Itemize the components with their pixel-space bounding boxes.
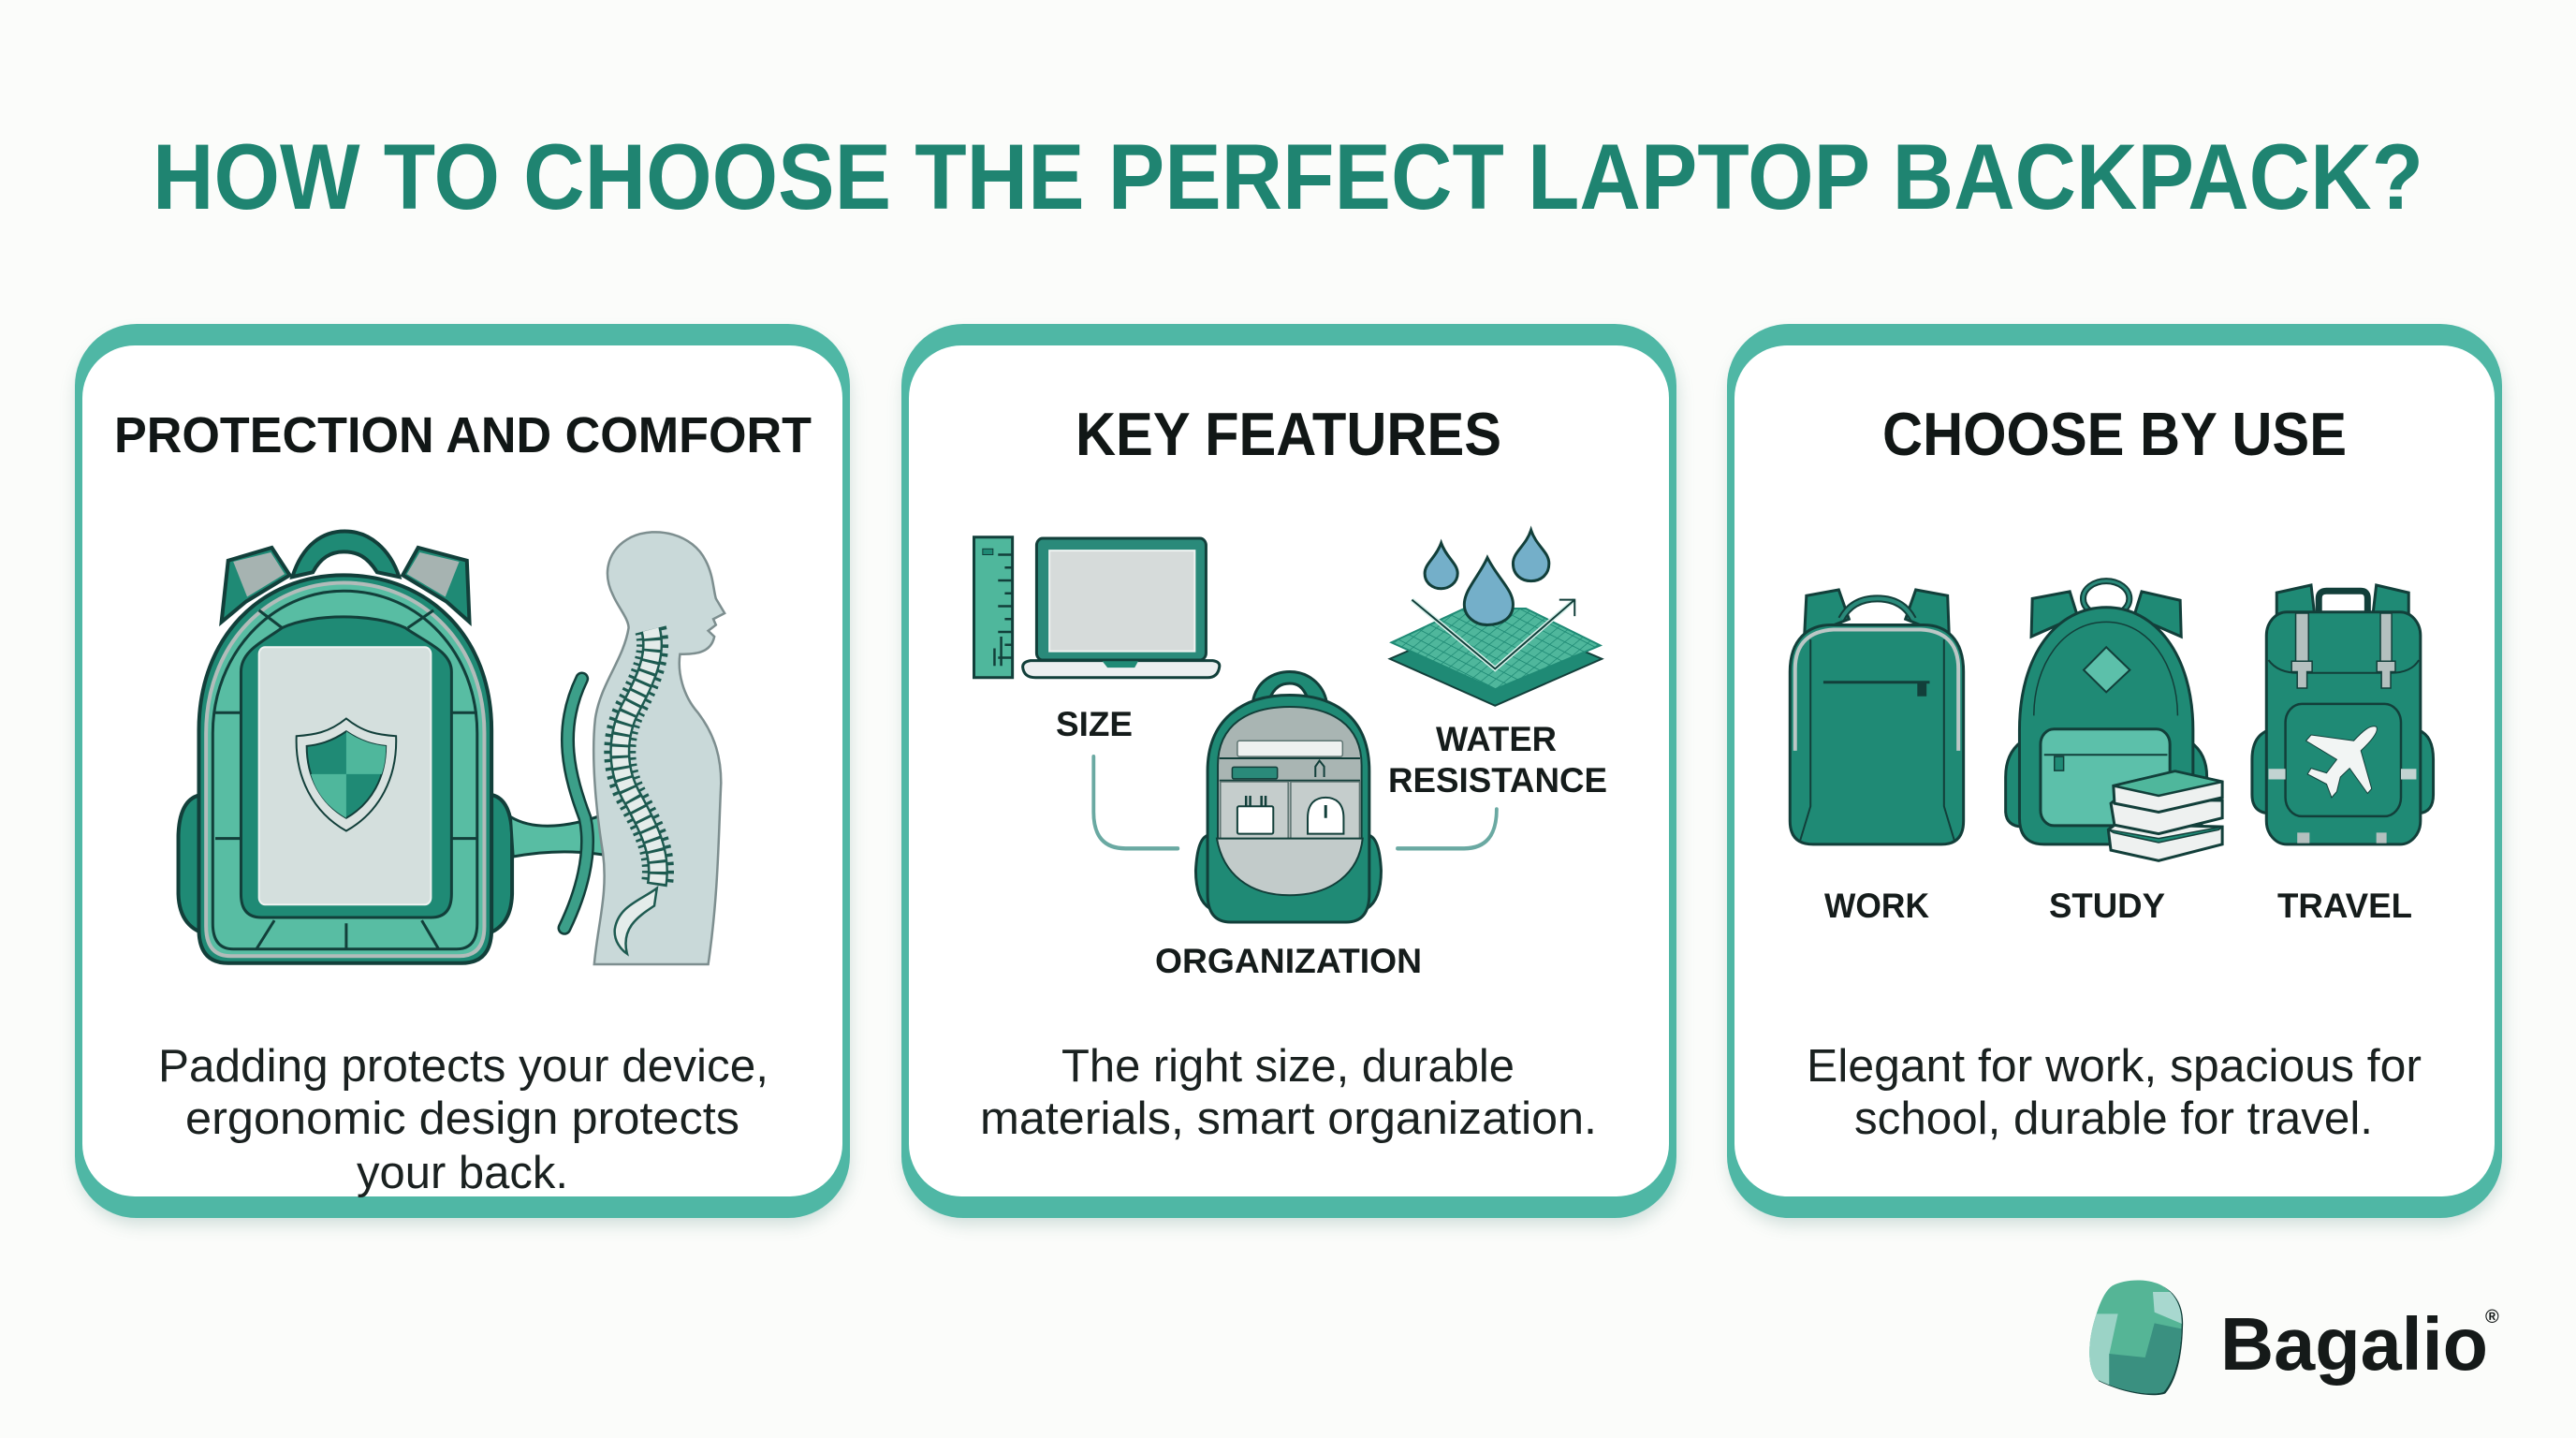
icon: airplane [2306, 726, 2377, 798]
body text: protection and comfort: ergonomic design protects [185, 1093, 739, 1144]
label: water resistance: WATER [1436, 720, 1557, 758]
label: study: STUDY [2049, 887, 2165, 925]
panel: choose by use [1727, 324, 2503, 1225]
icon: lumbar support [510, 679, 615, 928]
label: water resistance [1388, 720, 1607, 800]
label: size: SIZE [1056, 705, 1133, 743]
body text: key features: materials, smart organization. [980, 1093, 1597, 1144]
label: organization: ORGANIZATION [1155, 942, 1422, 980]
icon: ruler and laptop [974, 537, 1220, 678]
panel: protection and comfort [75, 324, 850, 1225]
body text: key features: The right size, durable [1061, 1041, 1515, 1092]
icon: water drops on fabric [1390, 530, 1602, 706]
body text: choose by use [1807, 1041, 2422, 1144]
label: water resistance: RESISTANCE [1388, 761, 1607, 800]
title: HOW TO CHOOSE THE PERFECT LAPTOP BACKPACK? [153, 125, 2423, 228]
body text: key features [980, 1041, 1597, 1144]
logo: Bagalio [2085, 1273, 2499, 1398]
heading: key features: KEY FEATURES [1076, 400, 1501, 468]
icon: stack of books [2108, 771, 2222, 860]
body text: choose by use: school, durable for travel. [1854, 1093, 2373, 1144]
wordmark: Bagalio [2220, 1302, 2488, 1386]
heading: protection and comfort: PROTECTION AND COMFORT [114, 407, 812, 463]
body text: protection and comfort: your back. [357, 1148, 568, 1198]
illustration: padded backpack [179, 532, 512, 963]
heading: choose by use: CHOOSE BY USE [1882, 400, 2347, 468]
registered mark: ® [2485, 1307, 2499, 1328]
icon: organized backpack interior [1195, 672, 1381, 922]
panel: key features [901, 324, 1677, 1225]
body text: protection and comfort: Padding protects your device, [158, 1041, 768, 1092]
label: travel: TRAVEL [2277, 887, 2412, 925]
icon: shield [297, 719, 396, 831]
arrow: size to organization [1093, 756, 1178, 848]
label: work: WORK [1824, 887, 1929, 925]
illustration: human silhouette with spine [593, 532, 724, 964]
arrow: water resistance to organization [1398, 809, 1497, 848]
icon: logo gem [2089, 1281, 2183, 1395]
body text: choose by use: Elegant for work, spacious for [1807, 1041, 2422, 1092]
body text: protection and comfort [158, 1041, 768, 1198]
icon: study backpack with books [2006, 581, 2222, 860]
icon: travel backpack with plane [2252, 585, 2434, 844]
icon: work backpack [1790, 590, 1964, 844]
